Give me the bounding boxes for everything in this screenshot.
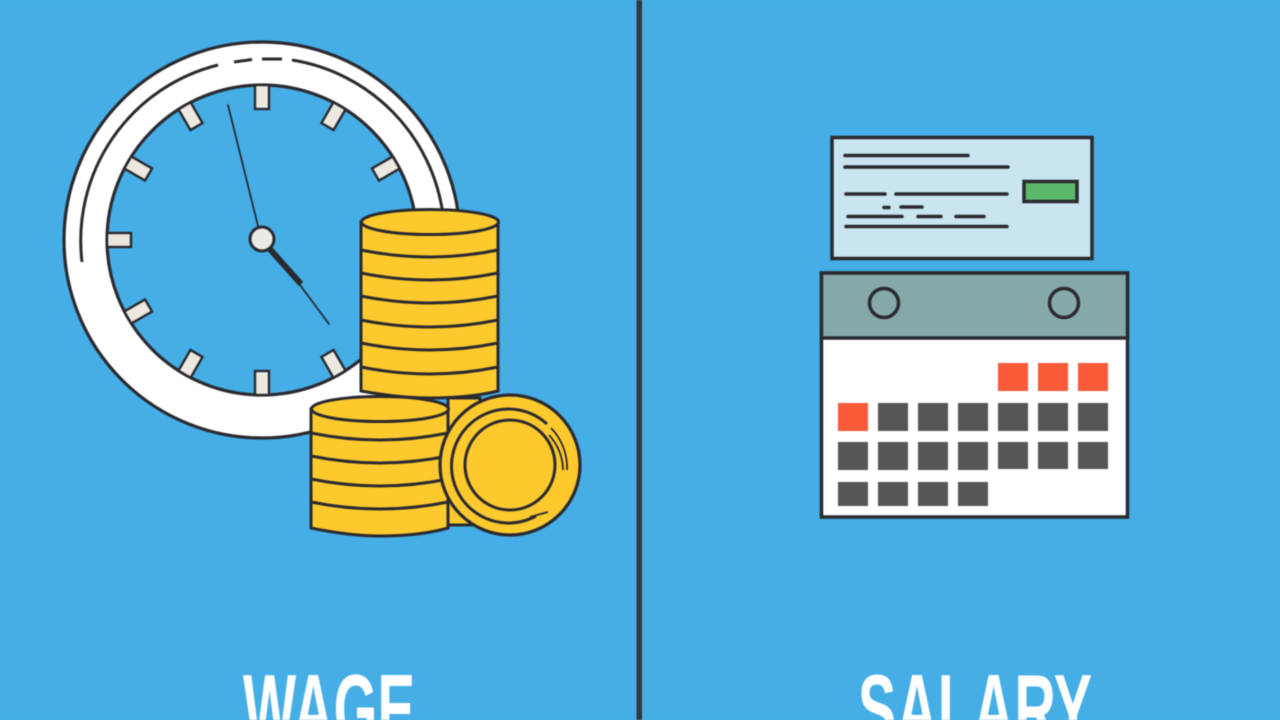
icon: rear coin behind small stack [448, 398, 480, 525]
icon: short coin stack [311, 396, 448, 536]
calendar highlighted days [838, 363, 1108, 431]
icon: front coin [440, 395, 580, 535]
clock hands [228, 105, 329, 324]
icon: calendar [822, 273, 1128, 517]
paycheck text lines [845, 156, 1008, 226]
center divider [636, 0, 642, 720]
icon: tall coin stack [361, 210, 498, 398]
icon: wall clock [64, 42, 460, 438]
clock hour ticks [107, 85, 400, 395]
calendar header [822, 273, 1128, 338]
paycheck amount box [1024, 182, 1077, 202]
icon: paycheck [832, 138, 1092, 258]
calendar binder rings [870, 288, 1078, 318]
calendar regular days [838, 403, 1108, 506]
